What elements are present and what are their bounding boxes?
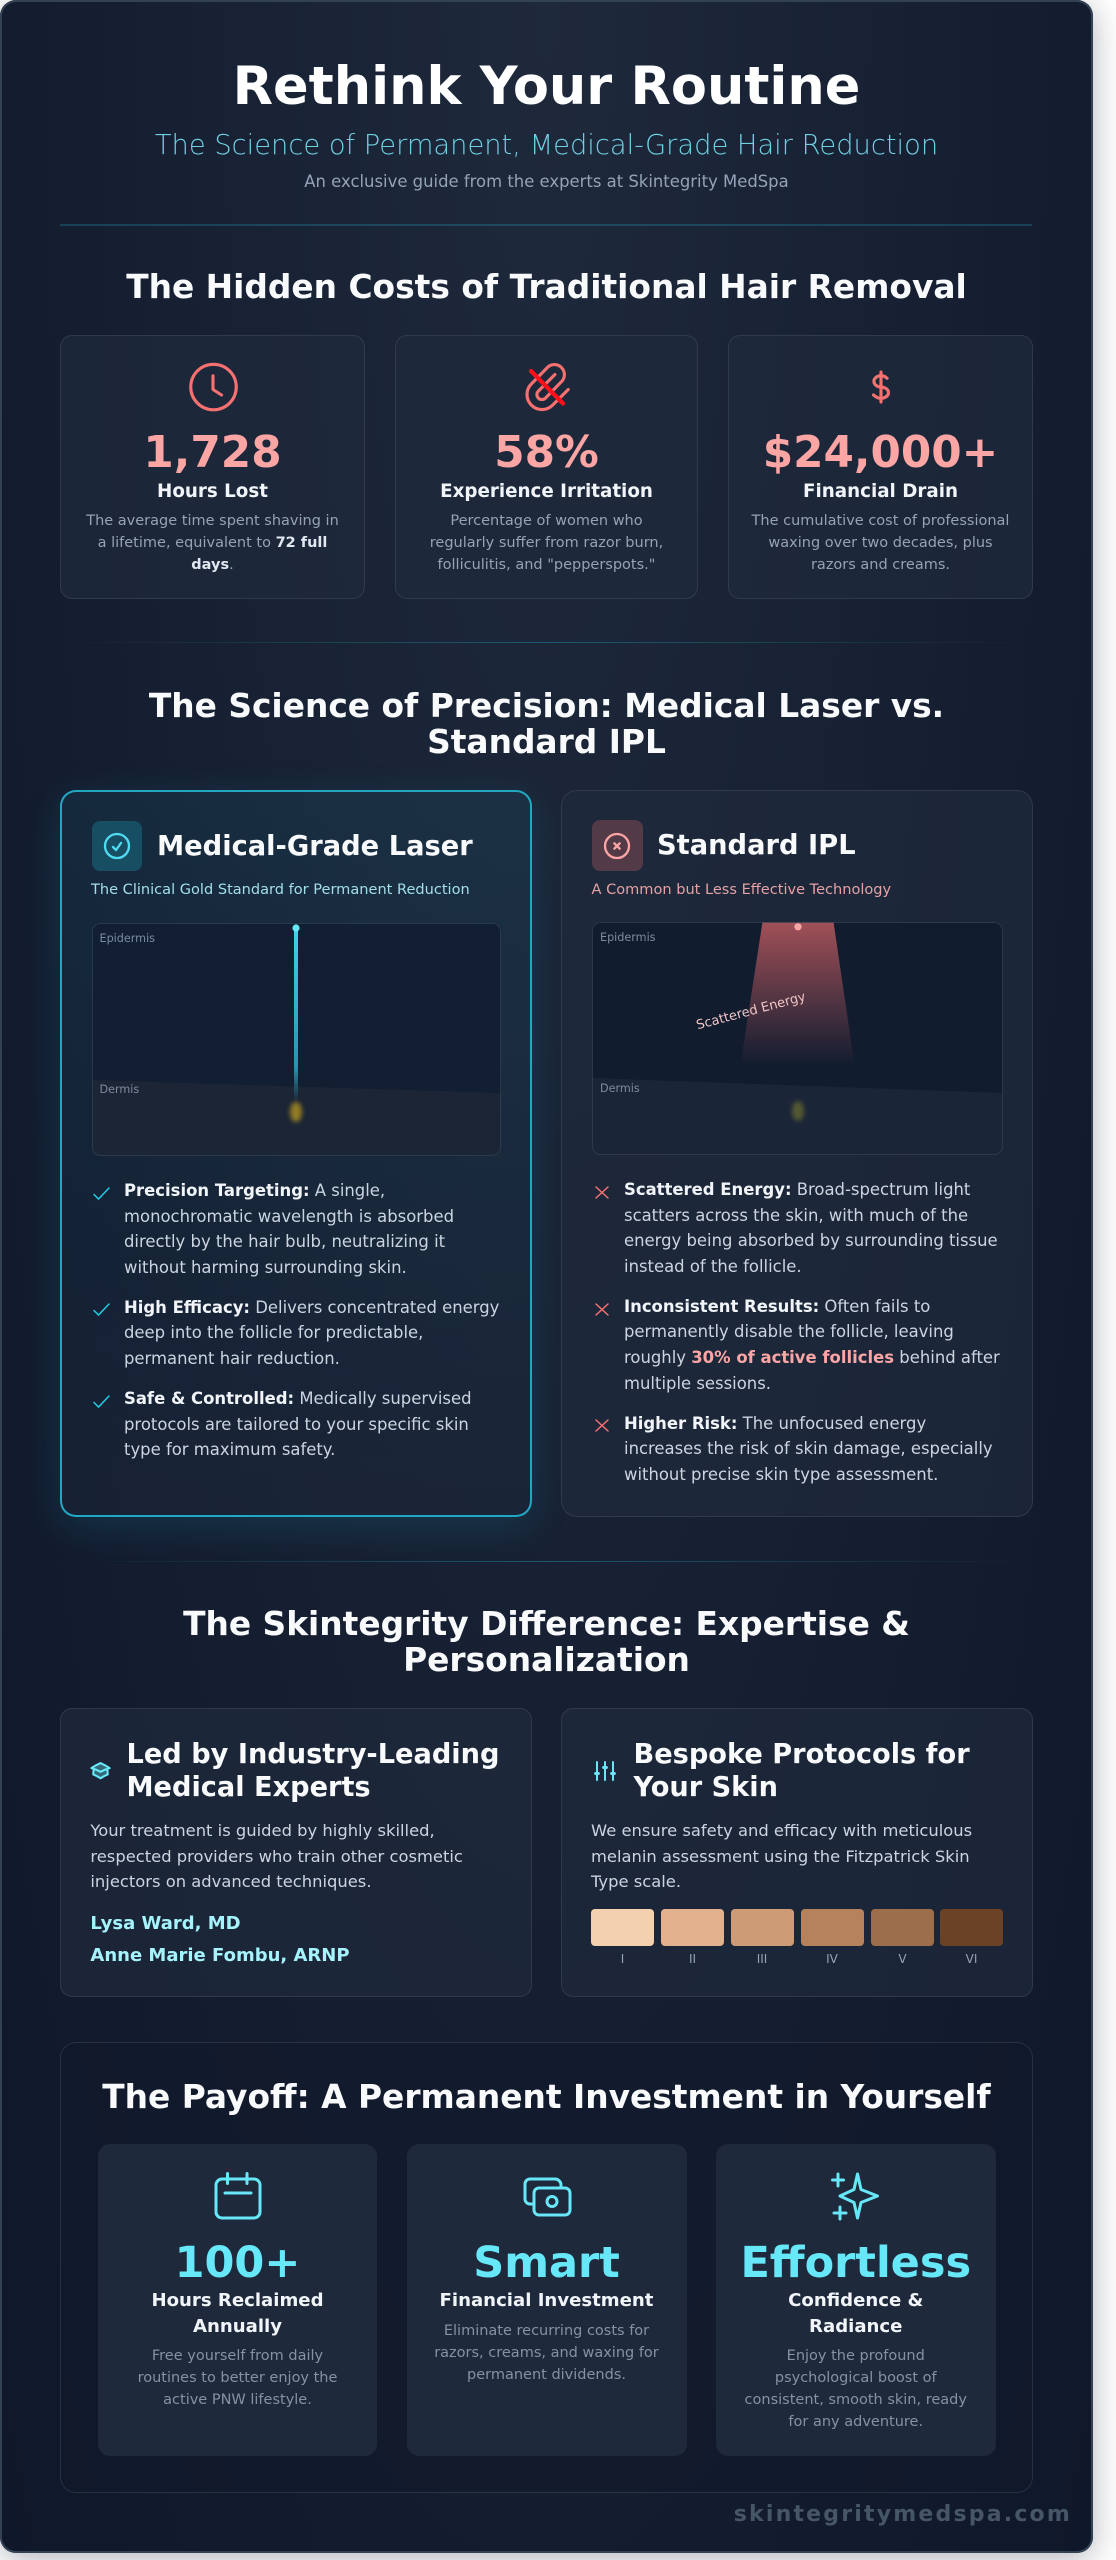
stat description: [86, 513, 339, 572]
icon: sliders: [594, 1761, 616, 1781]
stat description: days.: [191, 556, 234, 572]
drawback: inconsistent results: permanently disable the follicle, leaving: [624, 1322, 954, 1341]
drawback: inconsistent results: Inconsistent Results: Often fails to: [624, 1297, 930, 1316]
benefit: precision targeting: Precision Targeting: A single,: [124, 1181, 385, 1200]
drawback: higher risk: increases the risk of skin damage, especially: [624, 1439, 993, 1458]
benefit: precision targeting: [124, 1181, 454, 1277]
stat description: [745, 2348, 967, 2430]
benefit: high efficacy: High Efficacy: Delivers concentrated energy: [124, 1298, 499, 1317]
stat description: razors, creams, and waxing for: [434, 2345, 659, 2361]
stat label: Annually: [193, 2316, 282, 2337]
card text: Type scale.: [591, 1872, 681, 1891]
stat label: Confidence &: [788, 2290, 923, 2311]
benefit: precision targeting: without harming surrounding skin.: [124, 1258, 407, 1277]
subtitle: The Science of Permanent, Medical-Grade Hair Reduction: [155, 130, 938, 161]
panel: medical experts: [60, 1708, 532, 1997]
diagram: scattered IPL light: Dermis: [600, 1082, 639, 1095]
benefit: precision targeting: directly by the hair bulb, neutralizing it: [124, 1232, 445, 1251]
card heading: Led by Industry-Leading: [126, 1738, 499, 1770]
heading: science of precision: [149, 687, 944, 761]
fitzpatrick scale: III: [757, 1952, 767, 1966]
stat description: a lifetime, equivalent to 72 full: [98, 535, 327, 551]
payoff card: confidence and radiance: [716, 2144, 996, 2456]
tagline: An exclusive guide from the experts at Skintegrity MedSpa: [304, 172, 789, 191]
stat label: Experience Irritation: [440, 480, 653, 502]
header: [155, 56, 938, 191]
card text: We ensure safety and efficacy with meticulous: [591, 1821, 972, 1840]
card text: [90, 1821, 463, 1891]
stat label: [788, 2290, 923, 2337]
payoff heading: The Payoff: A Permanent Investment in Yourself: [102, 2078, 991, 2116]
drawback: higher risk: Higher Risk: The unfocused energy: [624, 1414, 926, 1432]
stat label: [151, 2290, 324, 2337]
stat description: routines to better enjoy the: [138, 2370, 337, 2386]
panel heading: Medical-Grade Laser: [157, 831, 473, 862]
card text: respected providers who train other cosmetic: [90, 1847, 463, 1866]
stat description: [751, 513, 1009, 572]
drawback: scattered energy: scatters across the skin, with much of the: [624, 1206, 968, 1225]
fitzpatrick scale: VI: [966, 1952, 977, 1966]
icon: clock: [189, 362, 238, 412]
icon: cross: [595, 1303, 609, 1316]
icon: check: [93, 1303, 110, 1316]
stat description: Eliminate recurring costs for: [444, 2323, 649, 2339]
drawback: inconsistent results: roughly 30% of active follicles behind after: [624, 1348, 1000, 1367]
icon: money stack: [524, 2178, 572, 2216]
stat card: irritation: [395, 335, 698, 599]
stat label: Financial Drain: [803, 480, 958, 502]
stat description: regularly suffer from razor burn,: [430, 535, 663, 551]
stat description: folliculitis, and "pepperspots.": [438, 556, 655, 572]
diagram: focused laser beam: [92, 923, 501, 1156]
drawback: scattered energy: instead of the follicle.: [624, 1257, 802, 1276]
icon: cross: [595, 1186, 609, 1199]
payoff card: financial investment: [406, 2144, 686, 2456]
icon: cross: [595, 1419, 609, 1432]
card heading: [633, 1738, 970, 1802]
icon: dollar: [872, 370, 890, 404]
diagram: focused laser beam: Dermis: [100, 1083, 139, 1096]
icon: calendar: [214, 2172, 262, 2220]
panel subtitle: The Clinical Gold Standard for Permanent Reduction: [91, 881, 470, 898]
diagram: scattered IPL light: Scattered Energy: [694, 990, 807, 1033]
diagram: focused laser beam: Epidermis: [100, 932, 155, 945]
stat description: Free yourself from daily: [152, 2348, 323, 2364]
stat card: hours lost: [60, 335, 365, 599]
icon: check: [93, 1395, 110, 1408]
stat number: 1,728: [143, 427, 282, 478]
big stat: Effortless: [740, 2238, 971, 2288]
stat description: [434, 2323, 659, 2383]
drawback: higher risk: [624, 1414, 993, 1484]
stat card: financial drain: [728, 335, 1033, 599]
stat description: [138, 2348, 337, 2408]
stat description: The cumulative cost of professional: [752, 513, 1009, 529]
title: Rethink Your Routine: [233, 56, 860, 117]
card text: melanin assessment using the Fitzpatrick Skin: [591, 1847, 970, 1866]
heading: skintegrity difference: Personalization: [403, 1641, 690, 1679]
stat description: Percentage of women who: [450, 513, 643, 529]
stat description: for any adventure.: [788, 2414, 923, 2430]
diagram: scattered IPL light: [592, 922, 1003, 1155]
provider name: Lysa Ward, MD: [90, 1912, 241, 1934]
icon: x circle: [592, 820, 642, 871]
footer website: skintegritymedspa.com: [734, 2502, 1072, 2527]
heading: science of precision: The Science of Precision: Medical Laser vs.: [149, 687, 944, 725]
fitzpatrick scale: I: [621, 1952, 624, 1966]
drawback: inconsistent results: multiple sessions.: [624, 1374, 771, 1393]
benefit: safe and controlled: [124, 1389, 472, 1459]
stat label: Radiance: [809, 2316, 902, 2337]
benefit: high efficacy: permanent hair reduction.: [124, 1349, 340, 1368]
benefit: safe and controlled: Safe & Controlled: Medically supervised: [124, 1389, 472, 1408]
benefit: high efficacy: deep into the follicle for predictable,: [124, 1323, 423, 1342]
stat description: consistent, smooth skin, ready: [745, 2392, 967, 2408]
diagram: scattered IPL light: Epidermis: [600, 931, 655, 944]
stat label: Hours Lost: [157, 480, 268, 502]
panel: bespoke protocols: [561, 1708, 1033, 1997]
stat label: Hours Reclaimed: [151, 2290, 324, 2311]
card text: injectors on advanced techniques.: [90, 1872, 372, 1891]
fitzpatrick scale: IV: [826, 1952, 838, 1966]
heading: hidden costs: The Hidden Costs of Traditional Hair Removal: [126, 268, 967, 306]
heading: skintegrity difference: [183, 1605, 910, 1679]
benefit: safe and controlled: protocols are tailored to your specific skin: [124, 1415, 469, 1434]
fitzpatrick scale: V: [898, 1952, 907, 1966]
big stat: 100+: [175, 2238, 300, 2288]
big stat: Smart: [473, 2238, 620, 2288]
drawback: scattered energy: Scattered Energy: Broad-spectrum light: [624, 1180, 970, 1199]
stat description: psychological boost of: [775, 2370, 937, 2386]
stat description: Enjoy the profound: [787, 2348, 925, 2364]
stat description: permanent dividends.: [467, 2367, 626, 2383]
icon: academic cap: [90, 1762, 111, 1780]
icon: check: [93, 1187, 110, 1200]
stat label: Financial Investment: [440, 2290, 653, 2311]
card heading: Bespoke Protocols for: [634, 1738, 970, 1770]
card heading: Medical Experts: [126, 1772, 371, 1802]
card heading: [126, 1738, 499, 1802]
stat number: $24,000+: [763, 427, 998, 478]
provider name: Anne Marie Fombu, ARNP: [90, 1945, 350, 1966]
stat description: waxing over two decades, plus: [768, 535, 993, 551]
panel subtitle: A Common but Less Effective Technology: [592, 880, 891, 898]
stat number: 58%: [494, 427, 599, 478]
drawback: inconsistent results: [624, 1297, 1000, 1393]
stat description: [430, 513, 663, 572]
payoff card: hours reclaimed: [98, 2144, 377, 2456]
benefit: safe and controlled: type for maximum safety.: [124, 1440, 335, 1459]
icon: crossed paperclip: [525, 363, 570, 412]
icon: check circle: [92, 821, 142, 871]
drawback: scattered energy: [624, 1180, 998, 1276]
heading: science of precision: Standard IPL: [427, 723, 666, 761]
panel: medical-grade laser: [60, 790, 532, 1517]
card heading: Your Skin: [634, 1772, 778, 1802]
benefit: precision targeting: monochromatic wavelength is absorbed: [124, 1207, 454, 1226]
drawback: scattered energy: energy being absorbed by surrounding tissue: [624, 1231, 998, 1250]
stat description: The average time spent shaving in: [86, 513, 339, 529]
fitzpatrick scale: II: [689, 1952, 696, 1966]
panel heading: Standard IPL: [657, 830, 856, 861]
panel: the payoff: [60, 2042, 1033, 2493]
stat description: razors and creams.: [811, 556, 950, 572]
card text: Your treatment is guided by highly skilled,: [90, 1821, 435, 1840]
stat description: active PNW lifestyle.: [163, 2392, 312, 2408]
heading: skintegrity difference: The Skintegrity Difference: Expertise &: [183, 1605, 910, 1643]
panel: standard IPL: [561, 790, 1033, 1517]
icon: sparkles: [831, 2172, 879, 2220]
benefit: high efficacy: [124, 1298, 499, 1368]
fitzpatrick scale: [591, 1909, 1003, 1966]
drawback: higher risk: without precise skin type assessment.: [624, 1465, 938, 1484]
card text: [590, 1821, 972, 1891]
